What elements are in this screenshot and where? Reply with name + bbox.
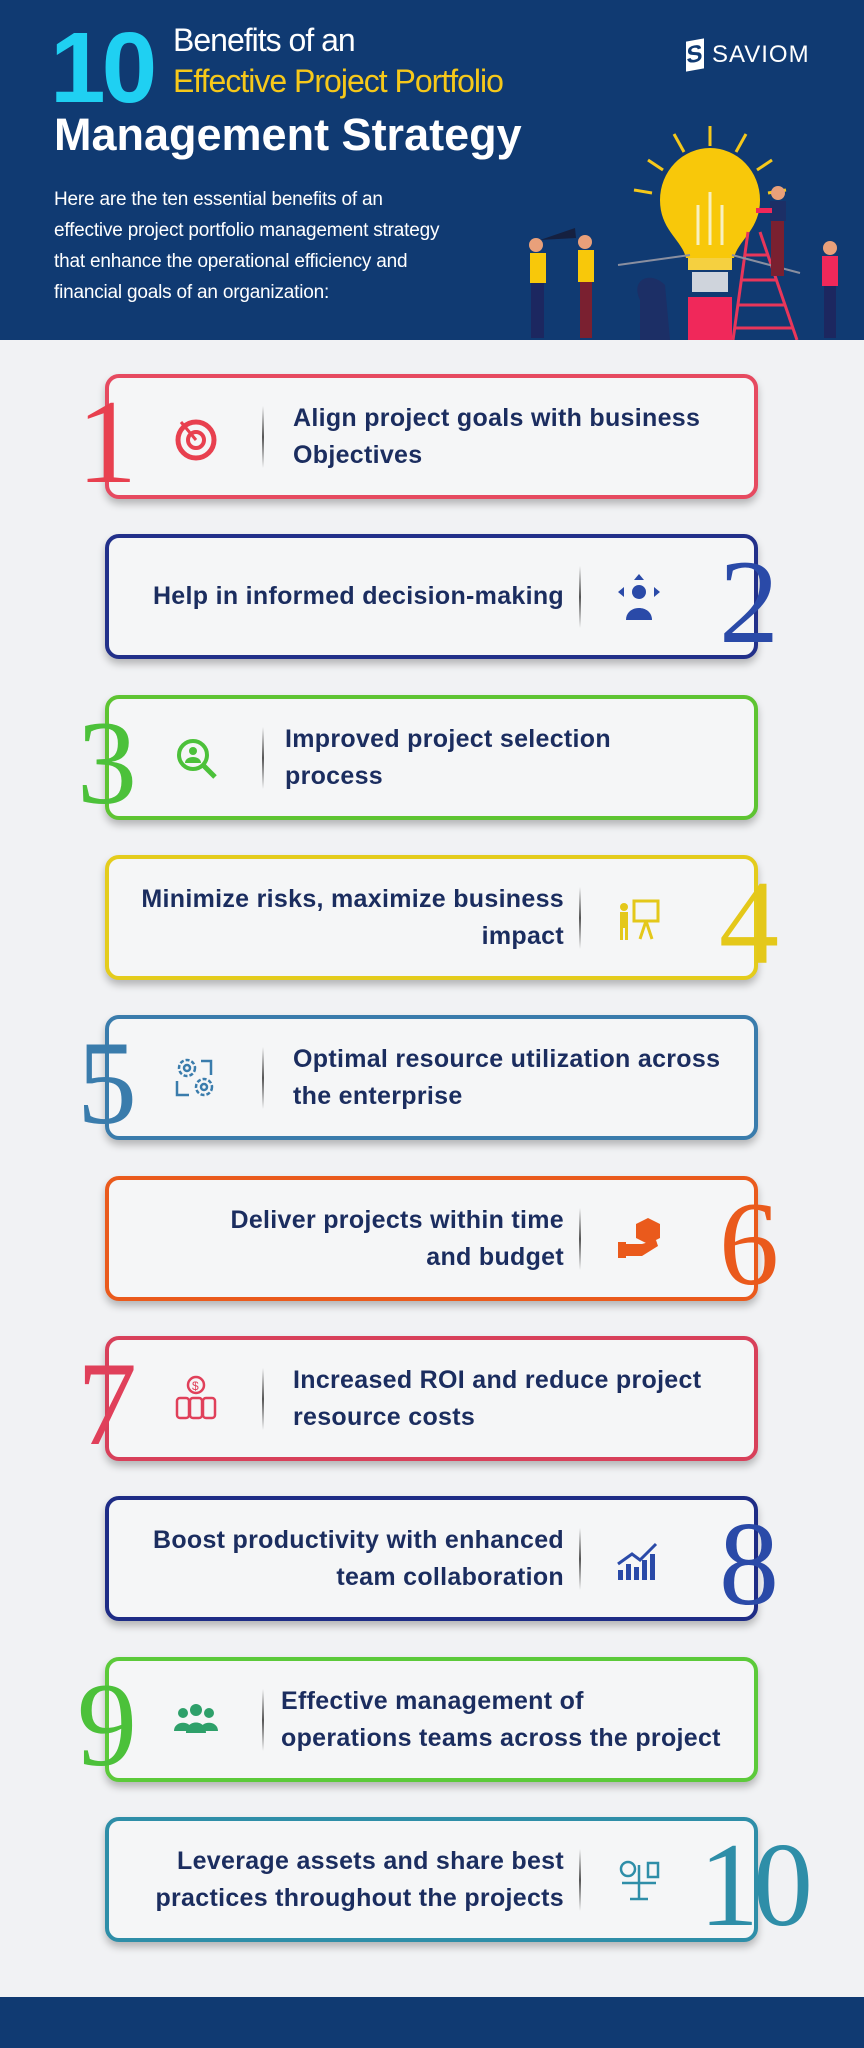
icon: gears (176, 1058, 214, 1096)
text 7 (293, 1366, 701, 1430)
text 10: Leverage assets and share best (177, 1846, 564, 1874)
text 1: Align project goals with business (293, 404, 700, 432)
text 3 (285, 724, 611, 790)
title line 3: Management Strategy (54, 109, 522, 160)
intro paragraph: that enhance the operational efficiency and (54, 251, 407, 272)
text 7: Increased ROI and reduce project (293, 1366, 701, 1394)
title line 1: Benefits of an (173, 22, 355, 58)
text 6: and budget (426, 1242, 564, 1270)
title number 10: 10 (50, 12, 153, 124)
intro paragraph: Here are the ten essential benefits of an (54, 189, 383, 210)
icon: assets scale (620, 1860, 660, 1900)
text 9: operations teams across the project (281, 1724, 721, 1752)
intro paragraph (54, 189, 440, 303)
footer bar (0, 1997, 864, 2048)
text 4: Minimize risks, maximize business (141, 884, 564, 912)
text 9 (281, 1686, 721, 1752)
text 1 (293, 404, 700, 468)
text 8: team collaboration (336, 1562, 564, 1590)
card 4 (105, 855, 758, 980)
card 7 (105, 1336, 758, 1461)
card 5 (105, 1015, 758, 1140)
text 2: Help in informed decision-making (153, 582, 564, 610)
number 6: 6 (719, 1177, 779, 1310)
text 1: Objectives (293, 440, 422, 468)
text 3: Improved project selection (285, 724, 611, 752)
icon: presentation (620, 900, 660, 940)
text 8: Boost productivity with enhanced (153, 1526, 564, 1554)
logo: SAVIOM (686, 38, 810, 72)
number 2: 2 (719, 535, 779, 668)
icon: team (174, 1704, 218, 1733)
text 5 (293, 1044, 720, 1110)
card 6 (105, 1176, 758, 1301)
text 10 (155, 1846, 564, 1912)
text 6: Deliver projects within time (230, 1206, 564, 1234)
people (529, 186, 838, 338)
icon: coins (176, 1376, 216, 1420)
text 6 (230, 1206, 564, 1270)
text 4 (141, 884, 564, 950)
card 10 (105, 1817, 758, 1942)
number 3: 3 (77, 696, 137, 829)
card 1 (105, 374, 758, 499)
text 4: impact (482, 922, 564, 950)
number 7: 7 (77, 1337, 137, 1470)
title line 2: Effective Project Portfolio (173, 63, 503, 99)
text 10: practices throughout the projects (155, 1884, 564, 1912)
number 10: 10 (699, 1818, 807, 1951)
icon: search person (177, 739, 217, 779)
text 5: the enterprise (293, 1082, 463, 1110)
number 1: 1 (77, 375, 137, 508)
intro paragraph: effective project portfolio management strategy (54, 220, 439, 241)
text 3: process (285, 762, 383, 790)
intro paragraph: financial goals of an organization: (54, 282, 329, 303)
number 4: 4 (719, 856, 779, 989)
illustration: lightbulb team (529, 126, 838, 340)
header panel (0, 0, 864, 340)
logo: SAVIOM: SAVIOM (712, 41, 810, 68)
text 9: Effective management of (281, 1686, 584, 1714)
card 9 (105, 1657, 758, 1782)
number 9: 9 (77, 1658, 137, 1791)
icon: coins: $ (192, 1379, 199, 1393)
number 5: 5 (77, 1016, 137, 1149)
card 3 (105, 695, 758, 820)
card 2 (105, 534, 758, 659)
text 7: resource costs (293, 1402, 475, 1430)
icon: decision person (618, 574, 660, 620)
icon: hand with box (618, 1218, 660, 1258)
text 8 (153, 1526, 564, 1590)
logo: SAVIOM: S (686, 40, 704, 70)
icon: target (176, 420, 216, 460)
card 8 (105, 1496, 758, 1621)
number 8: 8 (719, 1497, 779, 1630)
icon: growth chart (617, 1543, 657, 1580)
text 5: Optimal resource utilization across (293, 1044, 720, 1072)
